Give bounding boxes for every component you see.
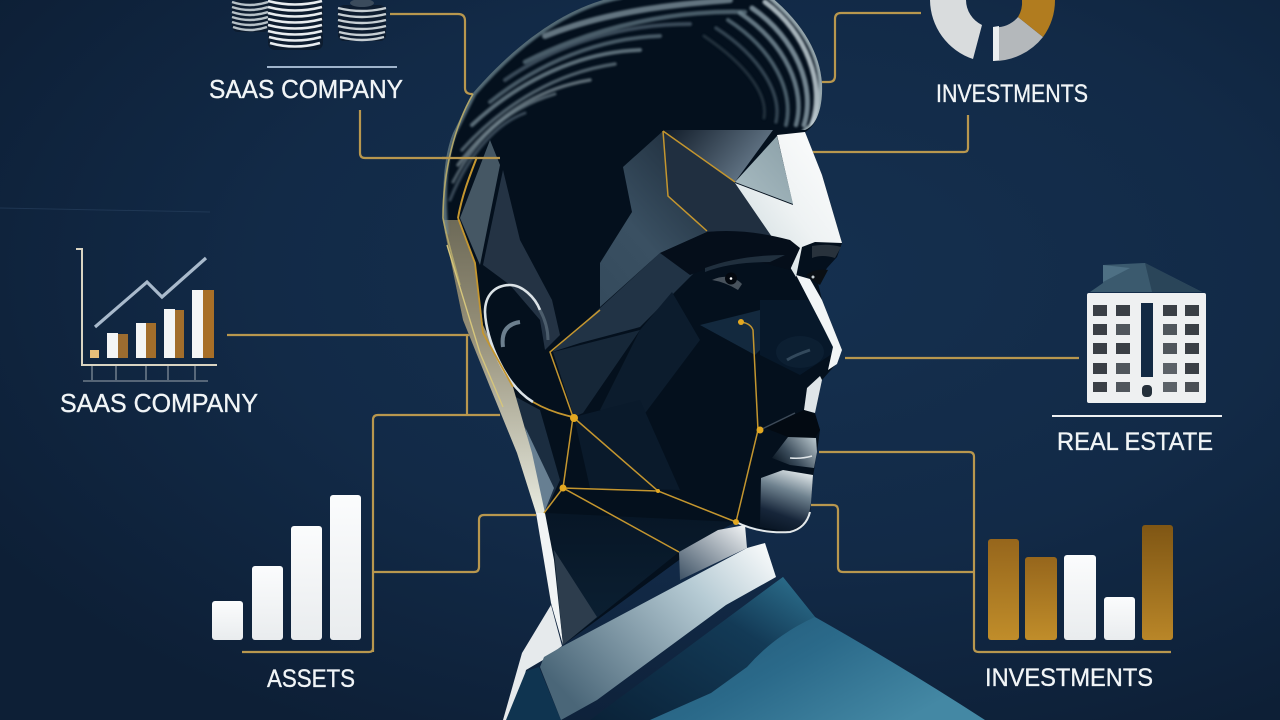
jacket lapel [590, 577, 815, 720]
neck shadow plane [554, 550, 597, 645]
stack 3 [338, 0, 386, 41]
side hair band [443, 220, 545, 513]
ear [485, 285, 548, 402]
chart: rising bars with trend line [76, 249, 217, 381]
donut gold segment [1018, 0, 1055, 37]
lower face planes [552, 235, 838, 490]
chart: investments bars [988, 525, 1173, 640]
label: real estate: REAL ESTATE [1057, 428, 1213, 456]
side hair planes [460, 140, 500, 265]
illustration: man in profile [442, 0, 985, 720]
lower lip highlight [772, 437, 817, 468]
eyebrow and eye sockets [660, 231, 841, 290]
collar [540, 543, 776, 720]
white forehead plane [735, 132, 842, 277]
label: saas company top: SAAS COMPANY [209, 74, 403, 104]
front of neck [679, 525, 747, 580]
stack 1 [232, 0, 269, 32]
lips [765, 410, 820, 438]
stack 2 [268, 0, 323, 50]
connector lines [227, 13, 1171, 652]
icon: donut chart [930, 0, 1055, 61]
hair streaks [443, 0, 822, 233]
facial mesh gold lines [442, 94, 795, 552]
chart: assets bars [212, 495, 361, 640]
facial mesh nodes [560, 319, 764, 525]
head silhouette [443, 0, 842, 645]
dark forehead plane [663, 132, 772, 237]
forehead wedge [735, 136, 793, 204]
neck dark plane [545, 513, 736, 645]
donut grey segment [993, 17, 1043, 61]
icon: building [1087, 263, 1206, 403]
label: investments top: INVESTMENTS [936, 80, 1088, 108]
temple plane [600, 131, 707, 307]
label: saas company left: SAAS COMPANY [60, 388, 258, 418]
donut white segment [930, 0, 982, 59]
chin contour [736, 512, 810, 532]
label: assets: ASSETS [267, 665, 355, 693]
nose highlight strip [796, 275, 842, 370]
icon: coin stacks [232, 0, 386, 50]
philtrum highlight [804, 376, 822, 413]
neck edge highlight [536, 513, 563, 645]
jacket shoulder [620, 577, 985, 720]
label: investments bottom: INVESTMENTS [985, 664, 1153, 692]
grey forehead plane [663, 130, 773, 182]
chin plane [760, 470, 813, 532]
left collar and tie area [503, 605, 562, 720]
